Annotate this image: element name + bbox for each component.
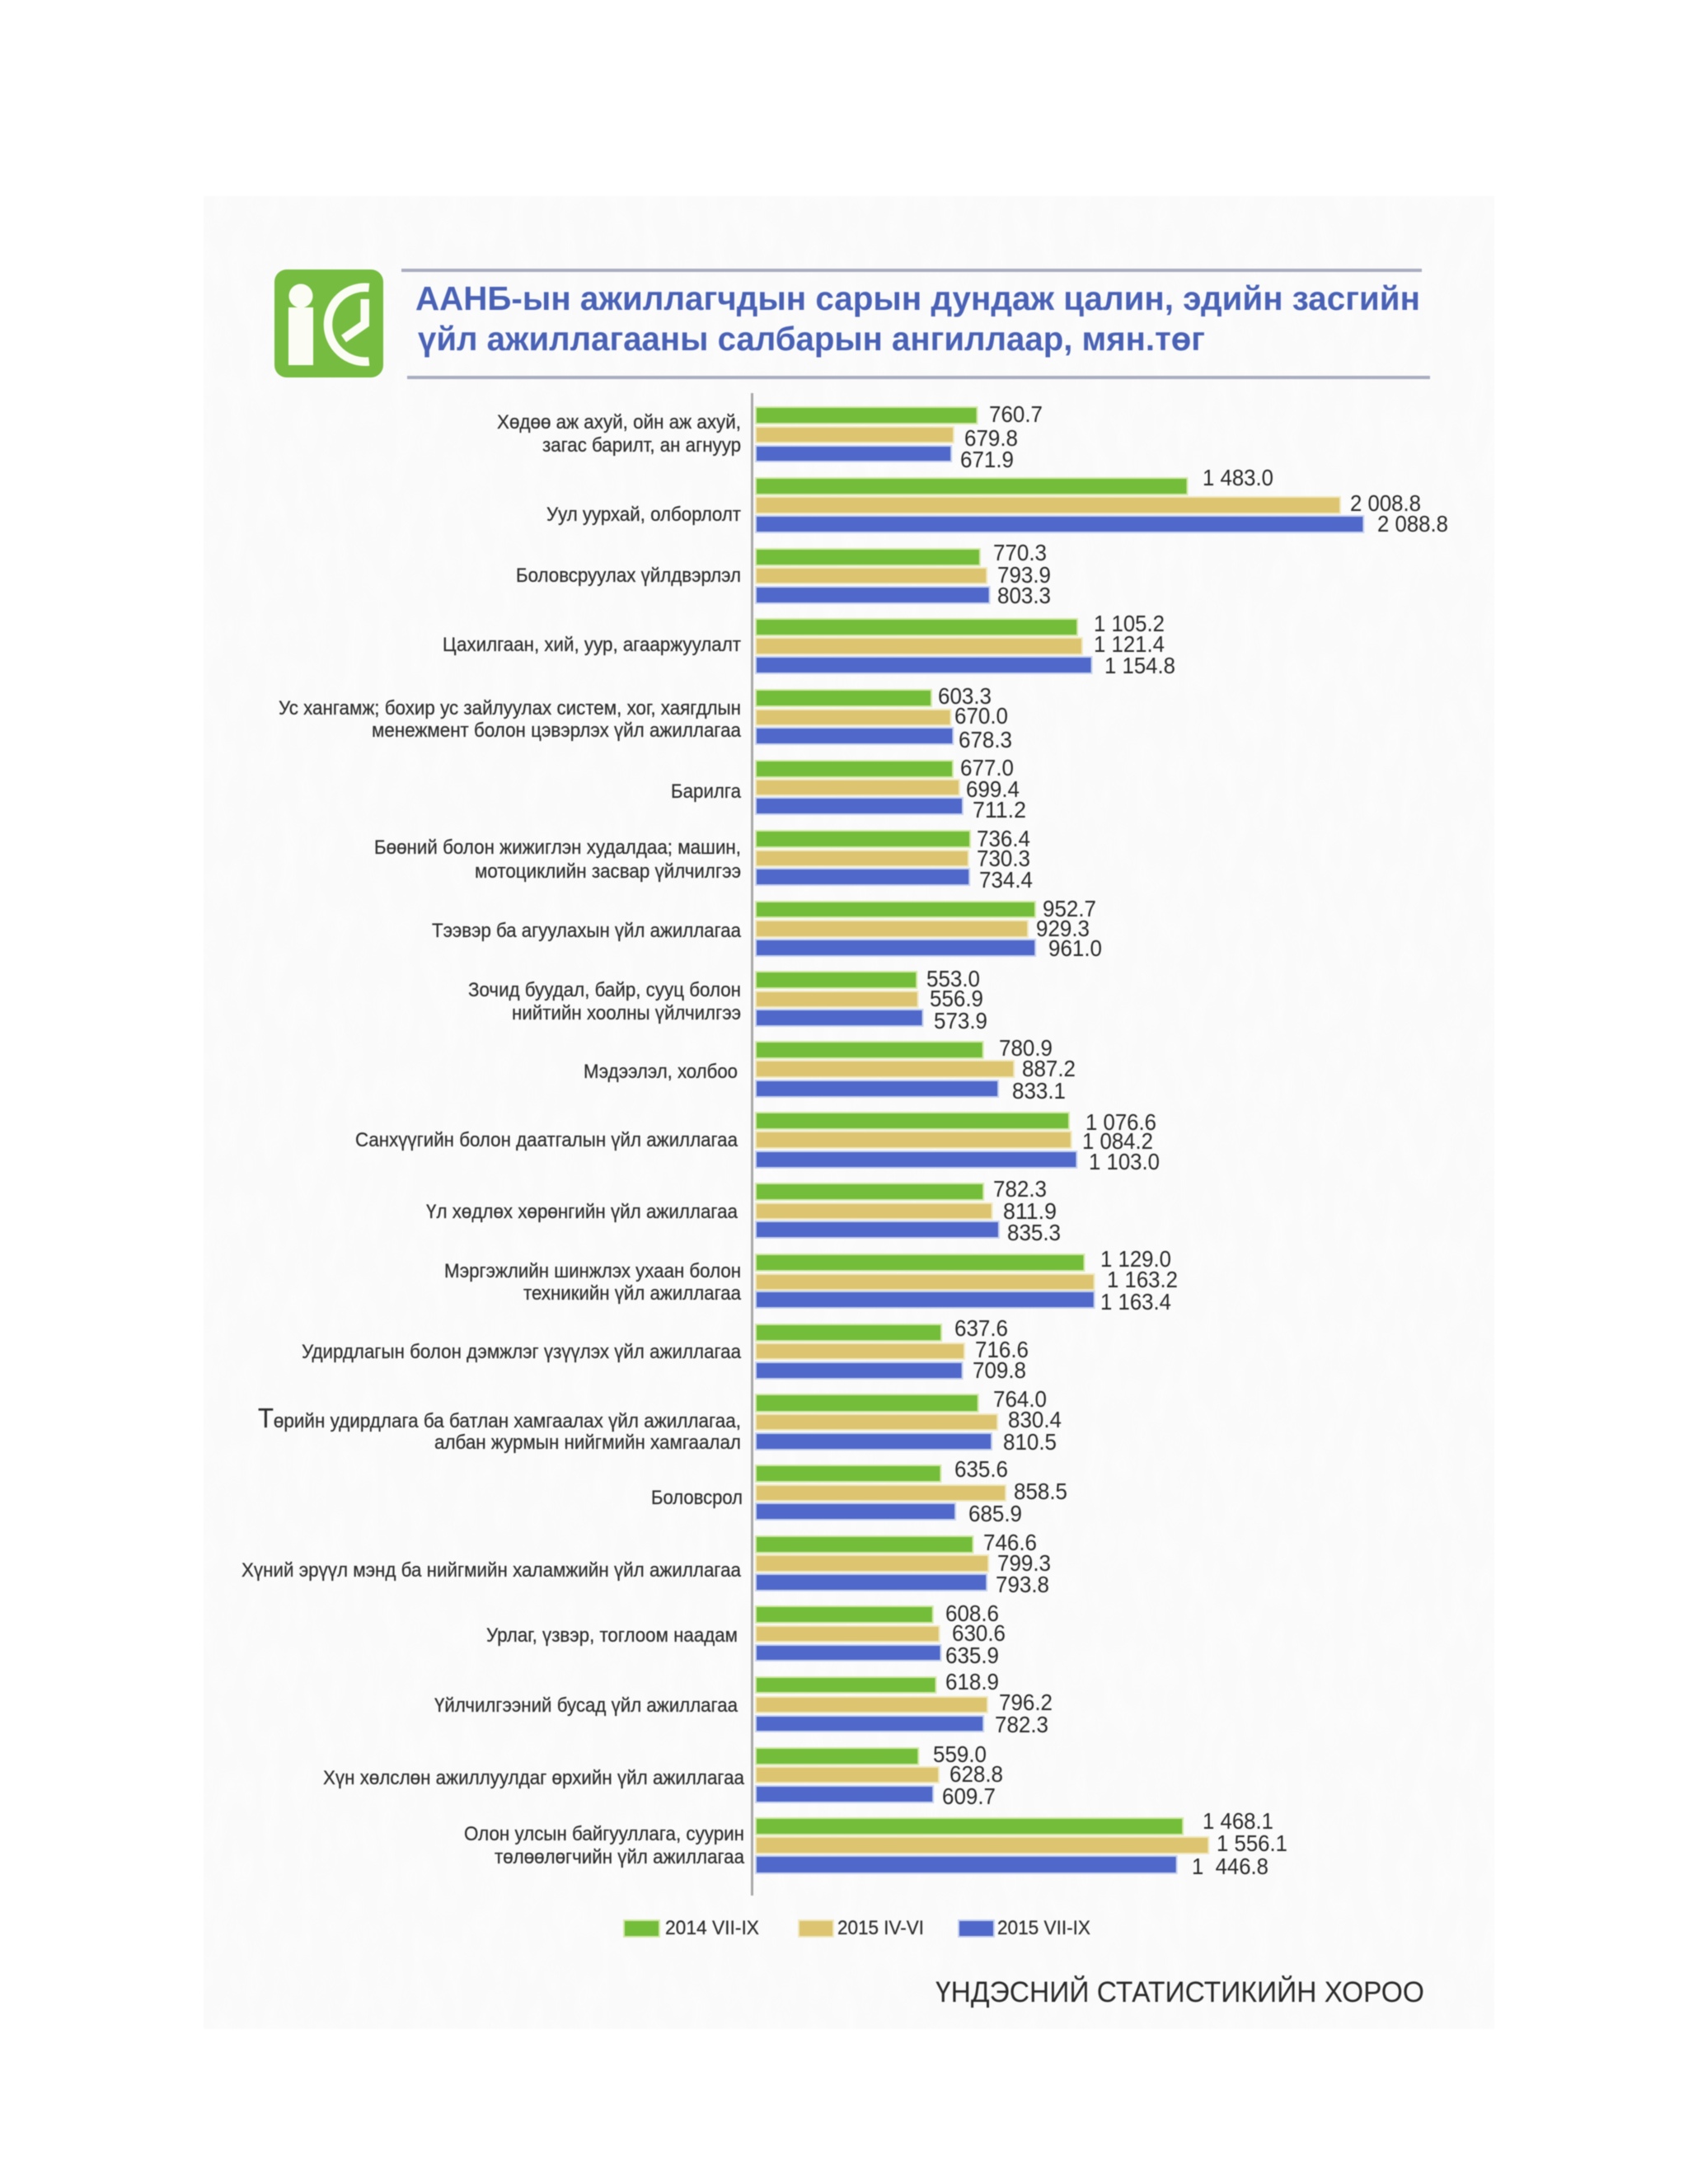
row: real estate <box>426 1176 1061 1245</box>
title block with rules: үйл ажиллагааны салбарын ангиллаар, мян.төг <box>418 320 1205 358</box>
values <box>993 1176 1061 1245</box>
category label <box>279 697 742 742</box>
values: 711.2 <box>973 797 1026 823</box>
values: 835.3 <box>1007 1220 1061 1245</box>
values: 782.3 <box>993 1176 1047 1202</box>
values: 1 076.6 <box>1085 1109 1156 1135</box>
category label: мотоциклийн засвар үйлчилгээ <box>475 860 741 883</box>
bars <box>756 831 970 885</box>
category label: Үйлчилгээний бусад үйл ажиллагаа <box>434 1694 738 1717</box>
bars <box>756 549 990 603</box>
category label: Хөдөө аж ахуй, ойн аж ахуй, <box>497 411 741 434</box>
values: 671.9 <box>960 447 1014 472</box>
category label: менежмент болон цэвэрлэх үйл ажиллагаа <box>372 719 742 742</box>
background panel <box>204 196 1494 2029</box>
values <box>954 1315 1029 1383</box>
category label <box>374 837 741 883</box>
values <box>1192 1808 1287 1879</box>
row: water supply <box>279 683 1012 752</box>
values: 618.9 <box>945 1669 999 1694</box>
bars <box>756 761 963 814</box>
category label: Мэдээлэл, холбоо <box>584 1061 738 1083</box>
bars <box>756 1042 1014 1097</box>
category label: төлөөлөгчийн үйл ажиллагаа <box>495 1846 745 1868</box>
values <box>1082 1109 1160 1174</box>
values: 635.6 <box>954 1456 1008 1482</box>
category label: Хүн хөлслөн ажиллуулдаг өрхийн үйл ажиллагаа <box>323 1767 745 1789</box>
footer organisation name: ҮНДЭСНИЙ СТАТИСТИКИЙН ХОРОО <box>935 1975 1424 2008</box>
row: construction <box>671 755 1026 823</box>
category label: Боловсруулах үйлдвэрлэл <box>516 565 741 587</box>
values: 630.6 <box>952 1620 1006 1646</box>
values: 780.9 <box>999 1035 1053 1061</box>
values: 833.1 <box>1012 1078 1066 1104</box>
category label: Барилга <box>671 780 742 803</box>
values <box>1100 1246 1178 1315</box>
values: 858.5 <box>1014 1479 1067 1504</box>
title block with rules: ААНБ-ын ажиллагчдын сарын дундаж цалин, эдийн засгийн <box>415 279 1420 317</box>
category label: Ус хангамж; бохир ус зайлуулах систем, хог, хаягдлын <box>279 697 741 719</box>
bars <box>756 1254 1095 1308</box>
values: 637.6 <box>954 1315 1008 1341</box>
values <box>960 401 1043 472</box>
values: 1 154.8 <box>1104 653 1175 678</box>
category label: Боловсрол <box>651 1487 743 1509</box>
values: 764.0 <box>993 1386 1047 1412</box>
values: 677.0 <box>960 755 1014 780</box>
values: 699.4 <box>966 776 1020 802</box>
values: 2 088.8 <box>1377 511 1448 537</box>
values <box>993 1386 1062 1455</box>
bars <box>756 690 953 744</box>
row: mining <box>546 465 1448 537</box>
category label: албан журмын нийгмийн хамгаалал <box>434 1432 741 1454</box>
values: 810.5 <box>1003 1429 1057 1455</box>
values: 929.3 <box>1036 916 1090 941</box>
row: arts <box>486 1601 1006 1668</box>
values <box>933 1741 1003 1809</box>
row: administrative <box>302 1315 1029 1383</box>
values: 1 446.8 <box>1192 1854 1268 1879</box>
category label: Урлаг, үзвэр, тоглоом наадам <box>486 1624 738 1647</box>
values: 887.2 <box>1022 1056 1076 1081</box>
values: 1 129.0 <box>1100 1246 1171 1272</box>
icon: logo with person and clock <box>274 269 383 377</box>
category label: Бөөний болон жижиглэн худалдаа; машин, <box>374 837 741 859</box>
category label <box>468 979 741 1024</box>
row: households <box>323 1741 1003 1809</box>
bars <box>756 619 1092 673</box>
values: 556.9 <box>930 986 983 1011</box>
category label: Зочид буудал, байр, сууц болон <box>468 979 741 1001</box>
values <box>938 683 1012 752</box>
values: 1 556.1 <box>1217 1830 1287 1856</box>
values <box>960 755 1026 823</box>
row: professional <box>444 1246 1178 1315</box>
values: 793.8 <box>996 1572 1049 1597</box>
row: information <box>584 1035 1076 1104</box>
row: accommodation <box>468 966 987 1033</box>
values: 770.3 <box>993 540 1047 565</box>
row: education <box>651 1456 1067 1526</box>
values: 635.9 <box>945 1643 999 1668</box>
row: public administration <box>258 1386 1062 1455</box>
bars <box>756 1606 941 1661</box>
values <box>999 1035 1076 1104</box>
category label: Цахилгаан, хий, уур, агааржуулалт <box>443 634 741 656</box>
values <box>977 826 1033 893</box>
bars <box>756 1113 1076 1168</box>
values: 782.3 <box>995 1712 1048 1737</box>
category label: Олон улсын байгууллага, суурин <box>464 1823 744 1845</box>
bars <box>756 1183 999 1238</box>
values: 2 008.8 <box>1350 490 1421 516</box>
bars <box>756 972 923 1026</box>
values: 679.8 <box>964 425 1018 451</box>
row: manufacturing <box>516 540 1051 608</box>
values: 716.6 <box>975 1337 1029 1362</box>
values: 603.3 <box>938 683 992 709</box>
bars <box>756 1394 997 1450</box>
legend: 2015 IV-VI <box>837 1917 924 1939</box>
bars <box>756 1677 987 1732</box>
category label: нийтийн хоолны үйлчилгээ <box>512 1002 741 1024</box>
values <box>954 1456 1067 1526</box>
category label: Төрийн удирдлага ба батлан хамгаалах үйл ажиллагаа, <box>258 1403 741 1433</box>
category label <box>258 1403 741 1454</box>
values <box>993 540 1051 608</box>
values: 736.4 <box>977 826 1030 851</box>
values <box>945 1601 1006 1668</box>
bars <box>756 1818 1208 1873</box>
values: 952.7 <box>1043 896 1096 921</box>
values: 730.3 <box>977 846 1030 871</box>
category label: Удирдлагын болон дэмжлэг үзүүлэх үйл ажиллагаа <box>302 1341 742 1363</box>
bars <box>756 902 1035 956</box>
bars <box>756 1748 939 1802</box>
values: 670.0 <box>954 703 1008 729</box>
row: trade <box>374 826 1033 893</box>
values: 1 105.2 <box>1094 611 1165 636</box>
category label: Хүний эрүүл мэнд ба нийгмийн халамжийн үйл ажиллагаа <box>241 1559 742 1582</box>
row: finance <box>355 1109 1160 1174</box>
title block with rules <box>401 269 1430 379</box>
values: 1 163.4 <box>1100 1289 1171 1315</box>
values: 628.8 <box>950 1761 1003 1787</box>
category label: Санхүүгийн болон даатгалын үйл ажиллагаа <box>355 1129 738 1151</box>
values: 608.6 <box>945 1601 999 1626</box>
legend: 2014 VII-IX <box>665 1917 759 1939</box>
values: 803.3 <box>997 583 1051 608</box>
row: agriculture <box>497 401 1043 472</box>
values: 709.8 <box>973 1357 1026 1383</box>
category label: Уул уурхай, олборлолт <box>546 504 741 526</box>
category label: Мэргэжлийн шинжлэх ухаан болон <box>444 1260 741 1282</box>
values: 1 084.2 <box>1082 1128 1153 1154</box>
bars <box>756 478 1363 532</box>
category label <box>444 1260 742 1305</box>
category label: техникийн үйл ажиллагаа <box>523 1282 742 1305</box>
category label: Тээвэр ба агуулахын үйл ажиллагаа <box>432 920 742 942</box>
row: other services <box>434 1669 1053 1737</box>
values: 799.3 <box>997 1550 1051 1576</box>
bars <box>756 1465 1006 1520</box>
values: 1 163.2 <box>1107 1267 1178 1292</box>
values <box>945 1669 1053 1737</box>
values: 685.9 <box>968 1501 1022 1526</box>
row: electricity <box>443 611 1175 678</box>
bars <box>756 407 978 462</box>
values: 830.4 <box>1008 1407 1062 1432</box>
values: 734.4 <box>979 867 1033 893</box>
values: 1 121.4 <box>1094 631 1165 657</box>
values <box>1094 611 1175 678</box>
row: health <box>241 1530 1051 1597</box>
values <box>983 1530 1051 1597</box>
values: 760.7 <box>989 401 1043 427</box>
row: transport <box>432 896 1102 961</box>
values: 796.2 <box>999 1690 1053 1715</box>
values: 746.6 <box>983 1530 1037 1555</box>
values: 1 468.1 <box>1203 1808 1273 1834</box>
values: 811.9 <box>1003 1198 1057 1224</box>
values <box>926 966 987 1033</box>
category label <box>497 411 741 457</box>
category label: загас барилт, ан агнуур <box>542 434 741 457</box>
values: 678.3 <box>959 727 1012 752</box>
values: 609.7 <box>942 1783 996 1809</box>
chart axis <box>751 393 753 1896</box>
row: international organizations <box>464 1808 1287 1879</box>
values: 573.9 <box>934 1008 987 1033</box>
legend: 2015 VII-IX <box>997 1917 1090 1939</box>
values: 553.0 <box>926 966 980 991</box>
values: 559.0 <box>933 1741 987 1767</box>
category label: Үл хөдлөх хөрөнгийн үйл ажиллагаа <box>426 1201 738 1223</box>
values: 1 483.0 <box>1203 465 1273 490</box>
values <box>1203 465 1448 537</box>
legend <box>624 1917 1090 1939</box>
category label <box>464 1823 745 1868</box>
values: 793.9 <box>997 562 1051 588</box>
values: 961.0 <box>1048 935 1102 961</box>
values <box>1036 896 1102 961</box>
values: 1 103.0 <box>1089 1149 1160 1174</box>
bars <box>756 1324 964 1379</box>
bars <box>756 1536 988 1591</box>
